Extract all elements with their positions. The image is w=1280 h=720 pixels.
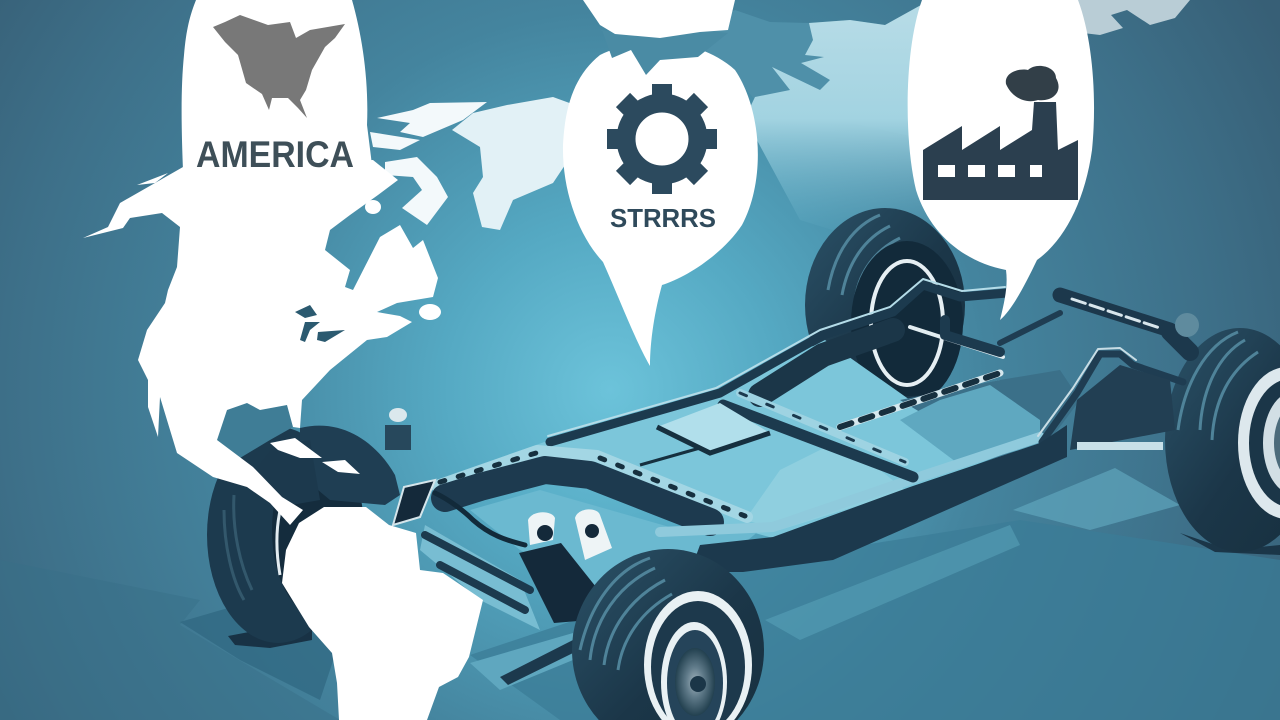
frame: rear cross rail xyxy=(840,373,1000,427)
frame: front snake line xyxy=(435,493,525,545)
frame: upper plate holes xyxy=(440,453,745,516)
frame: front lower bars xyxy=(425,535,530,610)
frame: near rail flange xyxy=(660,437,1040,532)
rear knob xyxy=(1175,313,1199,337)
map: Aleutian islet xyxy=(137,173,168,185)
bar: rear lower xyxy=(1077,442,1163,450)
chassis frame xyxy=(425,279,1190,610)
chassis floor pan xyxy=(420,340,1080,630)
map: South America xyxy=(282,507,483,720)
wheel: front xyxy=(572,549,764,720)
map: Arctic blob xyxy=(365,200,381,214)
callout: gear xyxy=(563,30,758,366)
callout: factory xyxy=(908,0,1094,320)
bracket: front box xyxy=(393,480,435,525)
wheel: back left xyxy=(207,427,364,648)
label: America: AMERICA xyxy=(196,134,354,175)
frame: rear arm xyxy=(910,327,1003,357)
map: coast over gear callout xyxy=(602,30,728,75)
frame: rear upswing xyxy=(1042,354,1183,442)
lower strut xyxy=(470,633,573,690)
map: Newfoundland xyxy=(419,304,441,320)
wheel: rear far xyxy=(805,208,965,420)
rail: near side xyxy=(690,425,1067,572)
hub: left dark xyxy=(255,440,320,507)
map: arctic islands xyxy=(370,102,487,225)
knob: left top xyxy=(385,408,411,450)
map: Greenland xyxy=(452,97,575,230)
icon: gear xyxy=(607,84,717,194)
frame: cross member xyxy=(723,405,913,477)
fender: left hub xyxy=(300,426,400,505)
map: top splash xyxy=(583,0,735,38)
callout: America xyxy=(182,0,372,175)
frame: rear bridge xyxy=(1000,313,1060,343)
map: top right land xyxy=(1070,0,1190,35)
frame: far rail xyxy=(550,285,1007,442)
floor shadows and reflections xyxy=(0,468,1280,720)
map: North America xyxy=(83,160,441,525)
frame: left side flange xyxy=(437,451,747,517)
rear dark mass xyxy=(1070,365,1175,450)
icon: factory xyxy=(923,66,1078,200)
front suspension xyxy=(519,509,612,623)
icon: North America xyxy=(213,15,345,118)
map: Central America strands xyxy=(270,438,360,474)
map: Great Lakes xyxy=(295,305,345,342)
plate: centre xyxy=(640,403,770,465)
icon: smoke xyxy=(1006,66,1059,101)
map: Eurasia light land xyxy=(745,0,930,260)
wheel: right xyxy=(1165,328,1280,552)
map: Gulf of Mexico water xyxy=(217,403,293,458)
label: STRRRS: STRRRS xyxy=(610,203,716,233)
frame: left side wall xyxy=(445,470,710,522)
map: Eurasia dark coastline xyxy=(600,0,931,140)
